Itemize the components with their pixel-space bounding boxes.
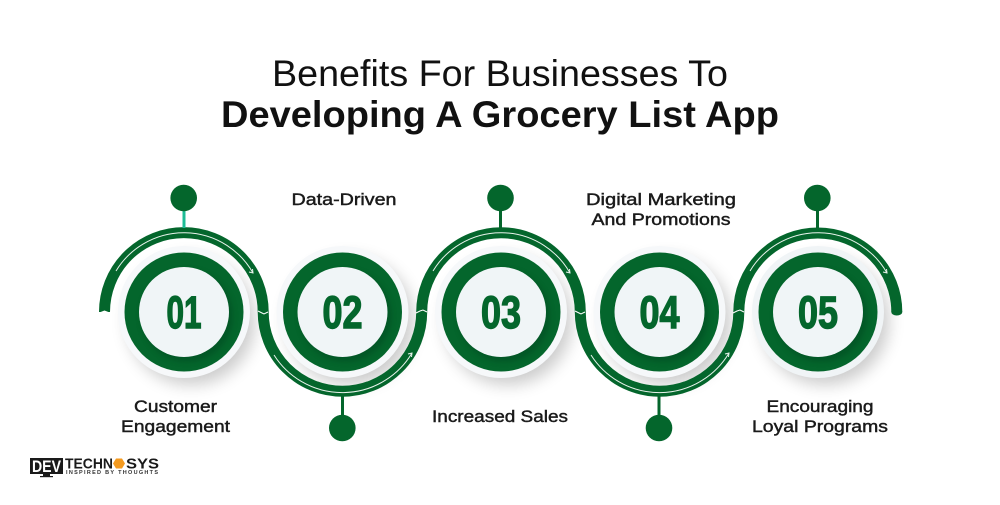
label: digital marketing and promotions: And Promotions [592,210,730,229]
logo: TECHN [65,456,113,472]
title [221,53,779,135]
logo: INSPIRED BY THOUGHTS [66,470,158,476]
serpentine ribbon [98,233,902,391]
step 3 disc: 03 [481,287,521,338]
label: customer engagement [121,397,230,436]
step 4 disc: 04 [640,287,680,338]
label: digital marketing and promotions: Digital Marketing [586,190,736,209]
title: Developing A Grocery List App [221,94,779,135]
step 2 disc [276,246,414,385]
step 1 disc [118,246,255,385]
ribbon end: left notch [98,310,111,316]
step 5 disc [752,246,889,385]
ribbon joints [258,311,268,314]
step 2 disc: 02 [322,287,362,338]
label: customer engagement: Customer [134,397,217,416]
marker 4 [646,396,672,441]
logo: SYS [126,456,159,472]
label: encouraging loyal programs: Loyal Programs [752,417,888,436]
marker 3 [487,185,514,228]
title: Benefits For Businesses To [272,53,728,94]
logo: DEV [32,457,62,476]
label: encouraging loyal programs [752,397,888,436]
step 1 disc: 01 [166,287,202,338]
label: increased sales: Increased Sales [432,407,568,426]
label: data-driven: Data-Driven [292,190,396,209]
ribbon arrows [116,233,887,393]
step 3 disc [435,246,572,385]
marker 2 [329,396,356,441]
marker 5 [804,185,831,228]
marker 1 [170,185,197,228]
label: customer engagement: Engagement [121,417,230,436]
step 4 disc [594,246,731,385]
label: digital marketing and promotions [586,190,736,229]
logo [30,456,159,477]
ribbon end: right rounded cap [891,308,902,316]
label: encouraging loyal programs: Encouraging [766,397,874,416]
step 5 disc: 05 [798,287,838,338]
